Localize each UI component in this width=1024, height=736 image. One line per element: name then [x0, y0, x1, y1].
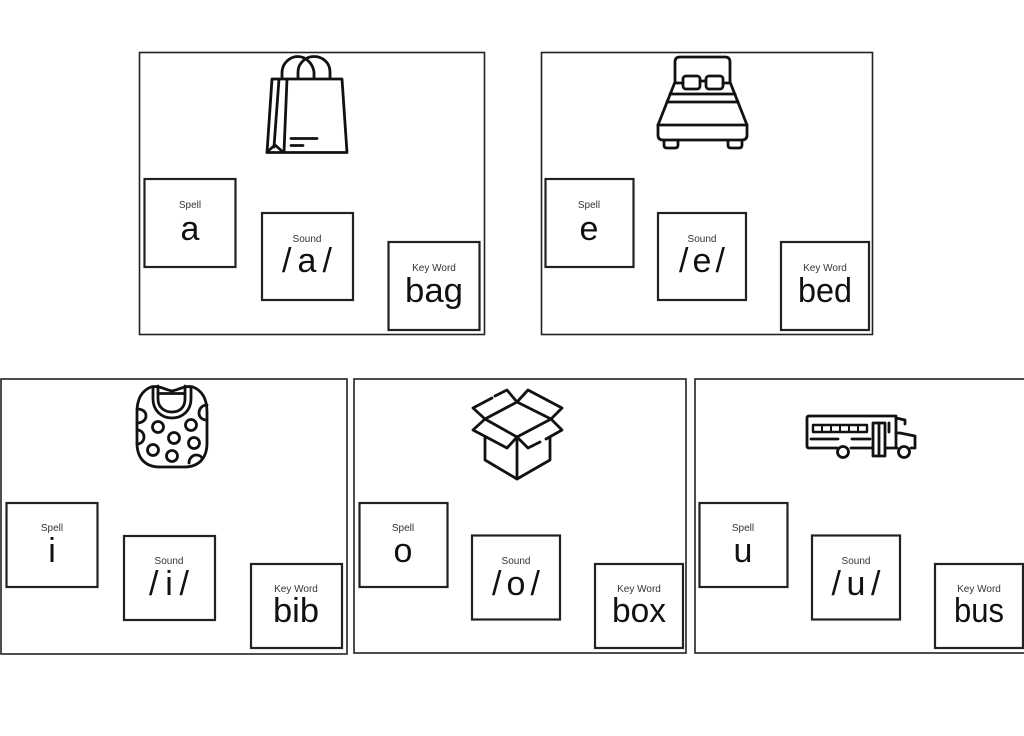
key word card: [935, 564, 1023, 648]
spell card: [546, 179, 634, 267]
sound card: /u/: [832, 565, 881, 603]
sound card: /e/: [679, 242, 726, 280]
panel: a: [140, 52, 484, 334]
sound card: /o/: [492, 565, 541, 603]
sound card: Sound: [293, 234, 321, 245]
sound card: Sound: [688, 234, 716, 245]
sound card: /a/: [282, 242, 333, 280]
spell card: Spell: [392, 523, 414, 534]
spell card: o: [394, 532, 412, 570]
spell card: [700, 503, 788, 587]
spell card: Spell: [732, 523, 754, 534]
key word card: bed: [798, 272, 852, 310]
sound card: [472, 536, 560, 620]
key word card: [595, 564, 683, 648]
spell card: [144, 179, 236, 267]
panel: i: [1, 379, 347, 654]
key word card: bib: [273, 592, 319, 630]
key word card: bag: [405, 272, 463, 310]
spell card: e: [580, 210, 598, 248]
sound card: Sound: [502, 556, 530, 567]
spell card: Spell: [41, 523, 63, 534]
key word card: [251, 564, 342, 648]
key word card: Key Word: [957, 584, 1001, 595]
spell card: Spell: [578, 200, 600, 211]
key word card: Key Word: [412, 263, 456, 274]
key word card: bus: [954, 592, 1004, 630]
spell card: [360, 503, 448, 587]
spell card: [6, 503, 98, 587]
sound card: Sound: [842, 556, 870, 567]
key word card: Key Word: [617, 584, 661, 595]
icon: bag: [267, 56, 347, 152]
key word card: Key Word: [803, 263, 847, 274]
icon: bus: [807, 416, 915, 458]
sound card: [124, 536, 215, 620]
sound card: [812, 536, 900, 620]
panel: o: [354, 379, 686, 653]
sound card: [262, 213, 353, 300]
sound card: Sound: [155, 556, 183, 567]
panel: u: [695, 379, 1024, 653]
icon: box: [473, 390, 562, 479]
spell card: a: [181, 210, 200, 248]
panel: e: [542, 52, 872, 334]
icon: bib: [137, 386, 207, 467]
spell card: u: [734, 532, 752, 570]
sound card: /i/: [149, 565, 190, 603]
sound card: [658, 213, 746, 300]
key word card: [388, 242, 480, 330]
spell card: i: [48, 532, 56, 570]
spell card: Spell: [179, 200, 201, 211]
key word card: Key Word: [274, 584, 318, 595]
key word card: box: [612, 592, 666, 630]
key word card: [781, 242, 869, 330]
icon: bed: [658, 57, 747, 148]
